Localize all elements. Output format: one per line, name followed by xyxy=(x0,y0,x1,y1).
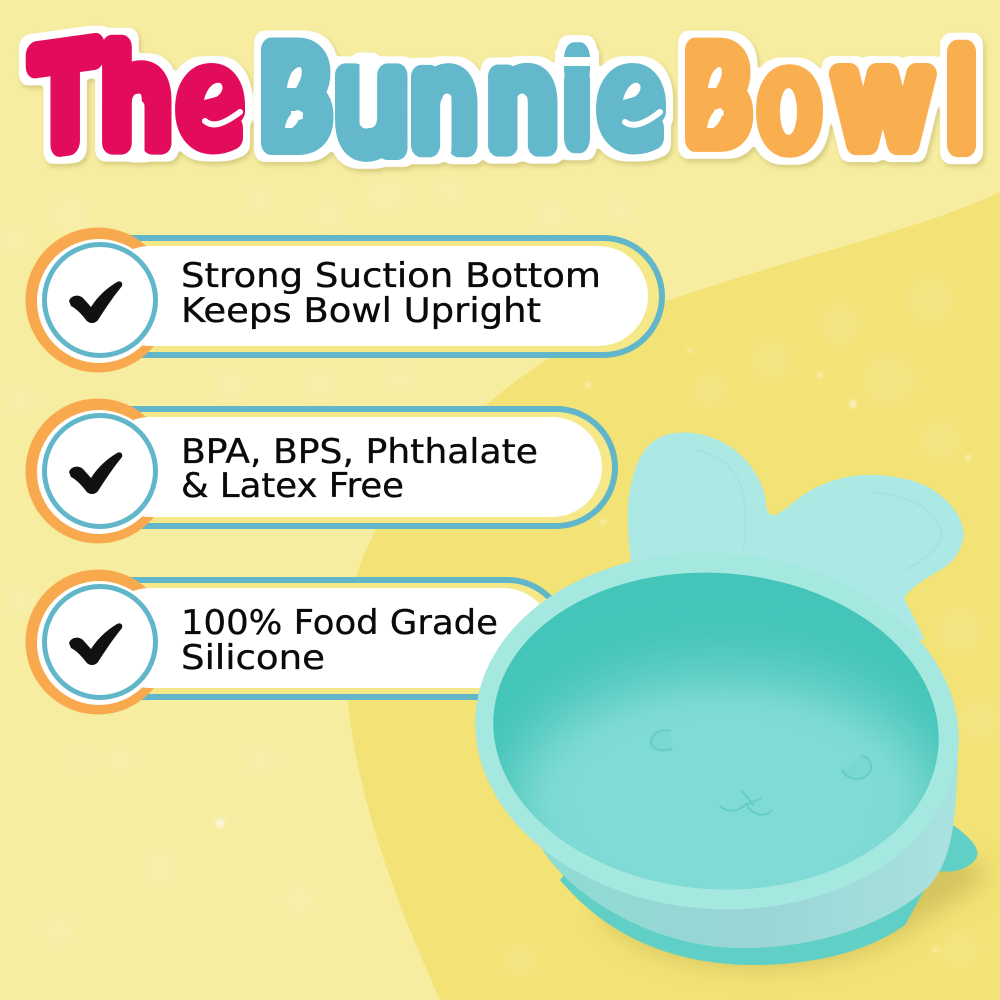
title: The Bunnie Bowl: B xyxy=(686,28,750,168)
letter slits xyxy=(139,66,660,150)
title: The Bunnie Bowl: n xyxy=(488,28,557,175)
title: The Bunnie Bowl xyxy=(35,20,975,181)
feature text: Strong Suction Bottom xyxy=(181,256,601,296)
feature text: Silicone xyxy=(181,638,325,678)
title: The Bunnie Bowl: u xyxy=(335,25,408,181)
title: The Bunnie Bowl: l xyxy=(948,33,975,174)
letter counters and slots xyxy=(204,57,797,135)
feature text xyxy=(181,432,538,506)
feature text xyxy=(181,603,498,678)
bunny bowl product xyxy=(463,432,990,967)
title: The Bunnie Bowl: B xyxy=(261,27,331,173)
feature text: Keeps Bowl Upright xyxy=(181,291,541,331)
title: The Bunnie Bowl: T xyxy=(35,20,95,178)
feature text: BPA, BPS, Phthalate xyxy=(181,432,538,472)
title: The Bunnie Bowl: h xyxy=(102,26,171,173)
title: The Bunnie Bowl: w xyxy=(834,25,932,175)
panel: BPA free xyxy=(26,398,615,544)
feature text: 100% Food Grade xyxy=(181,603,498,643)
suction base xyxy=(560,800,977,965)
ears xyxy=(628,432,964,640)
title: The Bunnie Bowl: i xyxy=(568,41,586,162)
icon: check mark xyxy=(69,281,122,323)
title: The Bunnie Bowl: e xyxy=(601,31,661,169)
bowl floor xyxy=(510,655,940,935)
icon: check mark xyxy=(69,452,122,494)
title: The Bunnie Bowl: e xyxy=(180,31,240,169)
rim xyxy=(463,537,971,925)
panel: strong suction xyxy=(26,228,662,372)
panel: food grade silicone xyxy=(26,570,566,714)
title: The Bunnie Bowl: o xyxy=(761,34,818,172)
feature text: & Latex Free xyxy=(181,466,404,506)
icon: check mark xyxy=(69,623,122,665)
feature text xyxy=(181,256,601,331)
title: The Bunnie Bowl: n xyxy=(412,30,476,175)
outer wall xyxy=(540,700,958,948)
embossed face xyxy=(651,730,871,815)
bowl interior xyxy=(483,558,949,904)
ear emboss lines xyxy=(695,450,942,570)
